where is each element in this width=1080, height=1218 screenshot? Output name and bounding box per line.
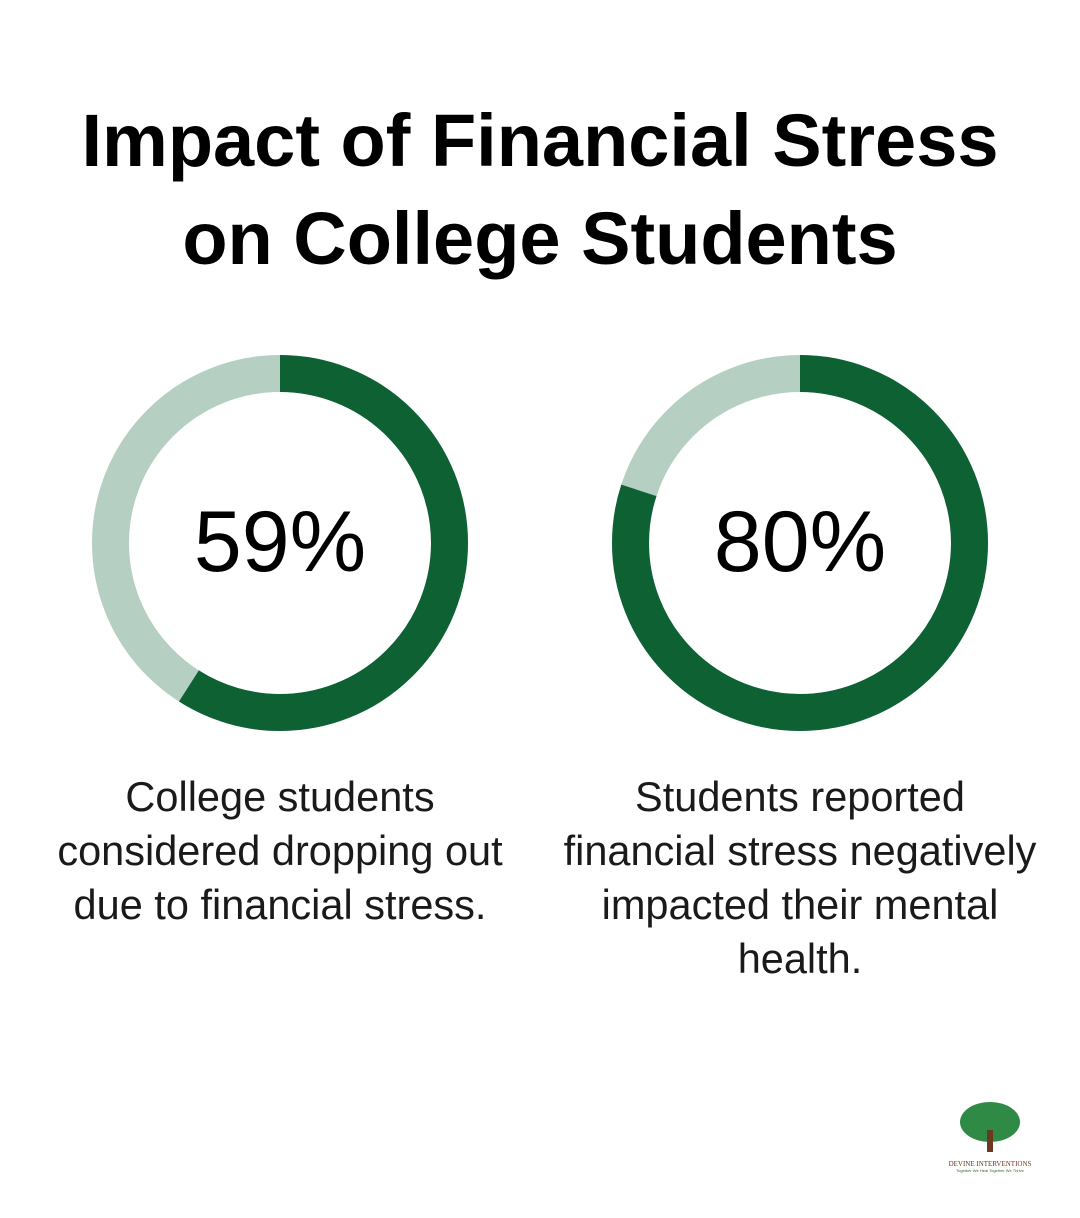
donut chart: 59%: 59% [194, 494, 366, 590]
text: 80% description: impacted their mental [602, 881, 998, 928]
text: 59% description: due to financial stress. [74, 881, 486, 928]
title [81, 99, 999, 280]
text: 59% description: considered dropping out [57, 827, 503, 874]
text: 80% description: health. [738, 935, 862, 982]
text: 80% description: financial stress negatively [564, 827, 1036, 874]
text: 80% description: Students reported [635, 773, 965, 820]
logo: Together We Heal Together We Thrive [956, 1168, 1024, 1173]
title: Impact of Financial Stress [81, 99, 999, 182]
logo: DEVINE INTERVENTIONS [949, 1160, 1031, 1168]
text: 59% description [57, 773, 503, 928]
title: on College Students [182, 197, 898, 280]
donut chart: 80% [612, 355, 988, 731]
text: 80% description [564, 773, 1036, 982]
donut chart: 80%: 80% [714, 494, 886, 590]
text: 59% description: College students [125, 773, 435, 820]
logo [948, 1102, 1031, 1173]
donut chart: 59% [92, 355, 468, 731]
